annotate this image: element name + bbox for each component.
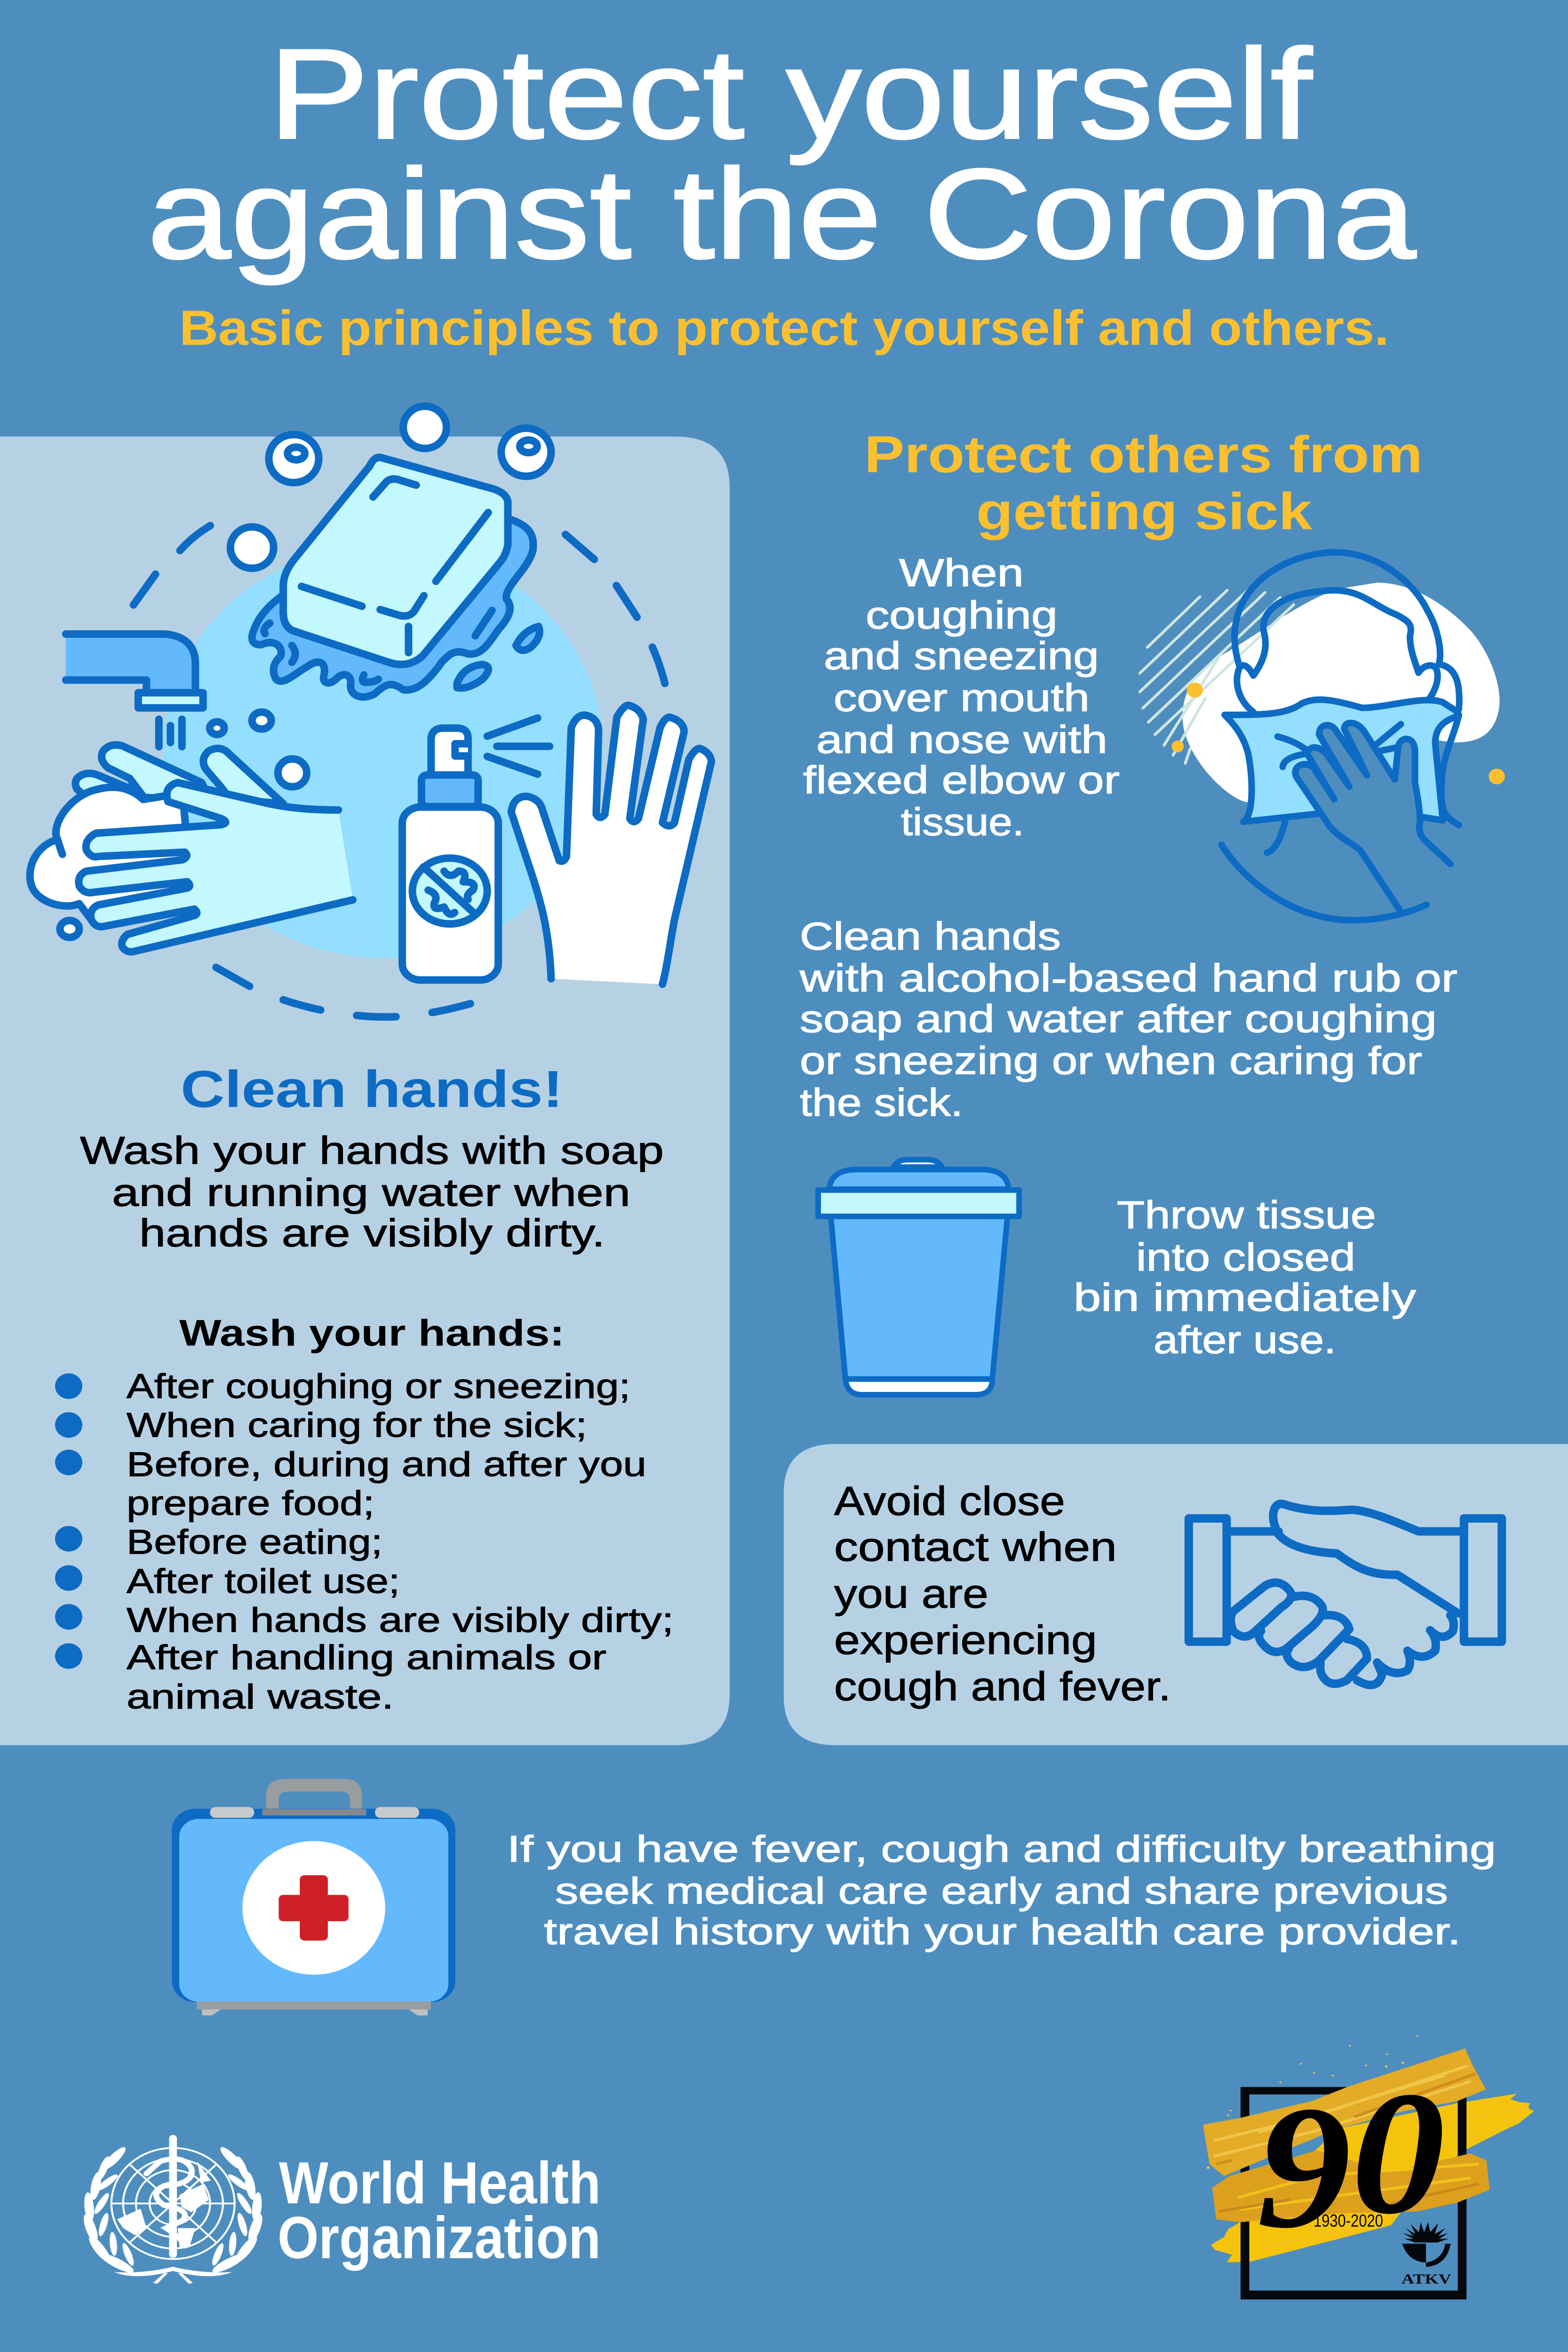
brush streaks (1214, 2066, 1529, 2249)
ATKV wordmark: ATKV (1401, 2271, 1452, 2287)
list: when to wash (127, 1367, 674, 1716)
text: avoid contact (834, 1478, 1171, 1709)
list: when to wash: Before, during and after you (127, 1446, 646, 1484)
title: against the Corona (147, 143, 1417, 286)
text: cover mouth: tissue. (901, 801, 1024, 844)
globe (111, 2148, 235, 2259)
head and hair (1222, 552, 1459, 920)
number 90: 9 (1257, 2069, 1351, 2265)
list: when to wash: After toilet use; (127, 1563, 400, 1601)
text: seek medical care: travel history with your health care provider. (544, 1911, 1461, 1952)
logo: World Health Organization: Organization (278, 2204, 601, 2271)
text: wash with soap: and running water when (112, 1171, 630, 1215)
text: throw tissue: into closed (1136, 1236, 1355, 1279)
heading: clean hands: Clean hands! (181, 1060, 563, 1118)
icon: first aid kit (172, 1779, 455, 2016)
list: when to wash: Before eating; (127, 1523, 382, 1561)
text: clean hands after coughing: soap and water after coughing (800, 997, 1437, 1041)
illustration: person coughing into tissue (1140, 552, 1505, 920)
text: avoid contact: contact when (834, 1524, 1117, 1569)
illustration: hand washing (30, 406, 711, 1017)
list: when to wash: When caring for the sick; (127, 1406, 587, 1445)
text: cover mouth (803, 552, 1120, 844)
text: throw tissue: bin immediately (1074, 1276, 1416, 1319)
logo: World Health Organization: World Health (279, 2150, 601, 2216)
number 90: 0 (1351, 2055, 1445, 2250)
text: clean hands after coughing: with alcohol-based hand rub or (799, 957, 1457, 1000)
tissue (1225, 699, 1458, 822)
white circle (242, 1841, 385, 1975)
panel background (0, 437, 730, 1745)
base (202, 2009, 428, 2016)
heading: protect others (864, 425, 1423, 540)
text: throw tissue: Throw tissue (1117, 1194, 1376, 1237)
text: seek medical care: seek medical care early and share previous (555, 1870, 1448, 1912)
icon: bin (818, 1160, 1019, 1395)
text: avoid contact: you are (834, 1571, 988, 1616)
panel: avoid close contact (784, 1444, 1568, 1745)
list: when to wash: After coughing or sneezing; (127, 1367, 630, 1406)
gold brush stroke middle (1212, 2150, 1489, 2222)
text: seek medical care (507, 1828, 1496, 1952)
text: throw tissue: after use. (1154, 1319, 1336, 1362)
logo: World Health Organization (278, 2150, 601, 2271)
gold brush stroke top (1203, 2049, 1486, 2176)
list: when to wash: prepare food; (127, 1485, 374, 1523)
dashed ring (134, 525, 665, 1017)
panel: clean hands (0, 406, 730, 1745)
text: cover mouth: coughing (866, 594, 1058, 637)
text: clean hands after coughing: the sick. (800, 1081, 963, 1124)
text: cover mouth: When (899, 552, 1024, 595)
text: clean hands after coughing (799, 915, 1457, 1124)
icon: soap bar (252, 457, 540, 697)
list: when to wash: animal waste. (127, 1678, 394, 1716)
panel background (784, 1444, 1568, 1745)
title: Protect yourself (269, 23, 1313, 166)
handle (266, 1779, 362, 1812)
text: cover mouth: cover mouth (834, 676, 1090, 720)
case body (172, 1809, 455, 2002)
icon: bubbles (60, 406, 551, 938)
text: seek medical care: If you have fever, cough and difficulty breathing (507, 1828, 1496, 1870)
text: clean hands after coughing: or sneezing or when caring for (800, 1039, 1422, 1082)
icon: sanitizer bottle (402, 718, 549, 980)
light blue circle (163, 545, 604, 958)
logo: WHO emblem (81, 2138, 265, 2284)
white blob (1183, 583, 1500, 810)
text: throw tissue (1074, 1194, 1416, 1362)
heading: protect others: Protect others from (864, 425, 1423, 484)
clasps (210, 1807, 254, 1818)
bullet markers (55, 1374, 82, 1669)
text: cover mouth: and nose with (816, 718, 1107, 762)
text: cover mouth: flexed elbow or (803, 759, 1120, 802)
icon: handshake (1189, 1504, 1502, 1685)
yellow brush stroke (1211, 2094, 1534, 2262)
icon: soapy hands (30, 745, 353, 952)
text: clean hands after coughing: Clean hands (800, 915, 1061, 958)
subtitle: Basic principles to protect yourself and others. (179, 301, 1389, 356)
paint spatter (1207, 2035, 1418, 2169)
list: when to wash: When hands are visibly dirty; (127, 1601, 674, 1639)
hand (1278, 723, 1450, 910)
heading: wash your hands: Wash your hands: (179, 1312, 565, 1354)
text: wash with soap (80, 1129, 664, 1255)
title (147, 23, 1417, 286)
icon: glove (511, 705, 711, 984)
red cross (279, 1875, 349, 1940)
heading: protect others: getting sick (976, 482, 1312, 540)
text: wash with soap: Wash your hands with soap (80, 1129, 664, 1173)
text: cover mouth: and sneezing (824, 635, 1099, 678)
logo: ATKV 90 years (1203, 2035, 1534, 2299)
text: avoid contact: experiencing (834, 1617, 1097, 1662)
years: 1930-2020 (1313, 2211, 1383, 2231)
square frame (1241, 2087, 1466, 2299)
laurel wreath (81, 2145, 265, 2284)
hatch lines (1140, 590, 1294, 763)
icon: faucet (66, 634, 203, 747)
text: avoid contact: Avoid close (834, 1478, 1065, 1524)
ATKV emblem (1402, 2222, 1450, 2267)
staff and serpent (146, 2138, 192, 2255)
yellow dots (1171, 683, 1505, 784)
list: when to wash: After handling animals or (127, 1639, 606, 1677)
text: wash with soap: hands are visibly dirty. (139, 1212, 605, 1255)
continents (117, 2161, 211, 2248)
text: avoid contact: cough and fever. (834, 1663, 1171, 1709)
